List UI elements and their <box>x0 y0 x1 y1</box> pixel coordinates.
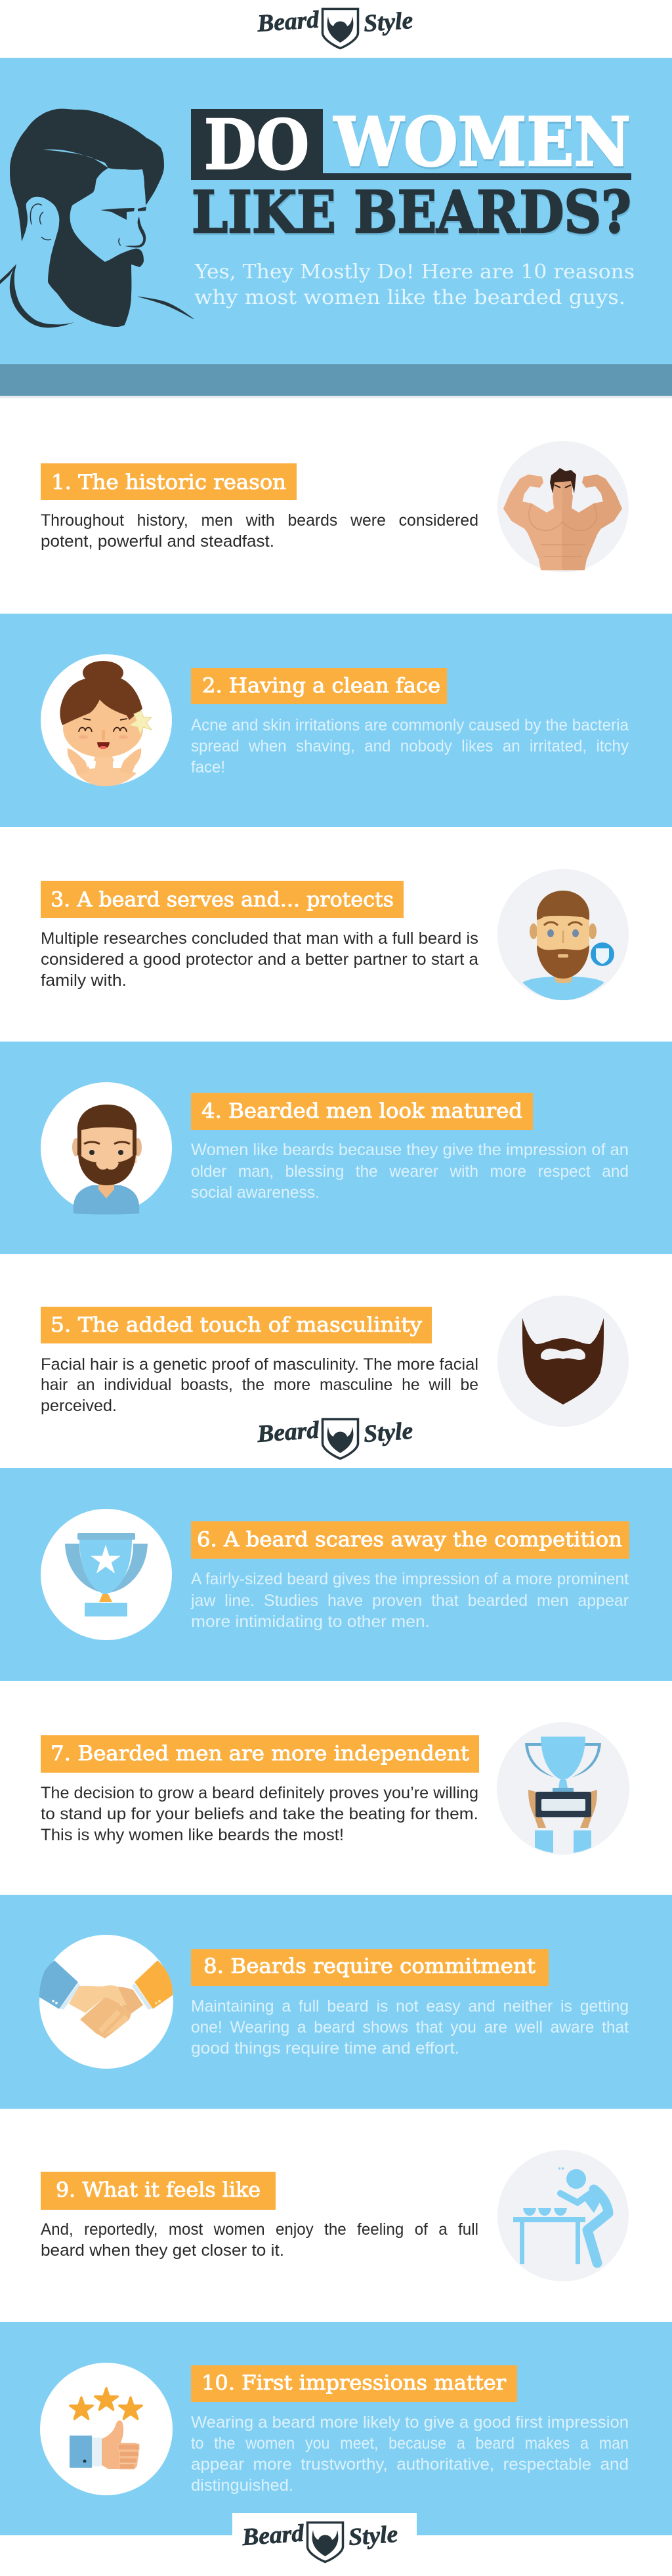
logo: bottom Beard Style <box>232 2513 417 2576</box>
heading 8 <box>191 1949 549 1986</box>
panel: reason 5 <box>0 1254 672 1468</box>
icon: thumbs up with stars <box>40 2363 173 2495</box>
text block 2: Acne and skin irritations are commonly caused by the bacteria <box>191 716 629 734</box>
panel: reason 9 <box>0 2109 672 2322</box>
icon: matured bearded man <box>41 1082 172 1214</box>
text block 3: considered a good protector and a better partner to start a <box>41 950 478 969</box>
logo: top Beard Style: Style <box>363 7 413 37</box>
icon: star trophy <box>41 1509 172 1640</box>
text block 7: to stand up for your beliefs and take the beating for them. <box>41 1805 478 1823</box>
heading 9 <box>41 2172 276 2210</box>
text block 5: hair an individual boasts, the more masculine he will be <box>41 1376 478 1394</box>
text block 6: jaw line. Studies have proven that bearded men appear <box>190 1592 629 1610</box>
icon: bearded man with shield <box>497 869 629 1000</box>
text block 5: Facial hair is a genetic proof of masculinity. The more facial <box>41 1355 478 1374</box>
logo: bottom Beard Style: Style <box>348 2521 398 2551</box>
icon: beard <box>497 1296 629 1427</box>
heading 10: 10. First impressions matter <box>201 2371 506 2395</box>
title: Do Women Like Beards?: WOMEN <box>333 103 631 182</box>
text block 1: Throughout history, men with beards were considered <box>41 511 478 530</box>
text block 3 <box>41 929 478 990</box>
text block 6 <box>190 1570 629 1631</box>
text block 7: This is why women like beards the most! <box>41 1826 344 1844</box>
text block 1 <box>41 511 478 551</box>
heading 3 <box>41 881 404 918</box>
text block 6: A fairly-sized beard gives the impression of a more prominent <box>191 1570 629 1588</box>
logo: top Beard Style <box>256 6 413 49</box>
heading 5 <box>41 1307 432 1343</box>
text block 10: Wearing a beard more likely to give a good first impression <box>191 2413 629 2432</box>
title: Do Women Like Beards?: DO <box>204 104 309 185</box>
text block 10: distinguished. <box>191 2476 293 2495</box>
text block 4: Women like beards because they give the impression of an <box>191 1141 629 1159</box>
text block 4 <box>191 1141 629 1202</box>
panel: reason 2 <box>0 614 672 827</box>
text block 2 <box>191 716 629 776</box>
illustration: bearded man profile <box>0 109 194 327</box>
text block 8: one! Wearing a beard shows that you are well aware that <box>191 2018 629 2037</box>
text block 10: to the women you meet, because a beard makes a man <box>191 2434 629 2453</box>
panel: reason 1 <box>0 396 672 614</box>
text block 8: Maintaining a full beard is not easy and neither is getting <box>191 1997 629 2016</box>
heading 5: 5. The added touch of masculinity <box>51 1313 423 1337</box>
text block 7 <box>41 1784 478 1844</box>
icon: woman washing face <box>41 654 172 786</box>
logo: bottom Beard Style: Beard <box>241 2520 305 2551</box>
text block 5: perceived. <box>41 1397 117 1415</box>
subtitle: why most women like the bearded guys. <box>194 286 625 309</box>
text block 10 <box>191 2413 629 2495</box>
title: Do Women Like Beards?: LIKE BEARDS? <box>192 178 631 246</box>
heading 1: 1. The historic reason <box>51 471 286 494</box>
heading 4 <box>191 1093 533 1130</box>
text block 8: good things require time and effort. <box>191 2039 459 2058</box>
text block 5 <box>41 1355 478 1415</box>
panel: reason 4 <box>0 1042 672 1254</box>
heading 4: 4. Bearded men look matured <box>201 1099 522 1123</box>
heading 3: 3. A beard serves and... protects <box>51 888 394 912</box>
heading 1 <box>41 463 297 500</box>
heading 7: 7. Bearded men are more independent <box>51 1742 470 1765</box>
icon: muscle man <box>497 441 629 572</box>
text block 3: family with. <box>41 971 127 990</box>
heading 10 <box>191 2365 517 2402</box>
text block 9: And, reportedly, most women enjoy the feeling of a full <box>41 2220 478 2239</box>
heading 2: 2. Having a clean face <box>202 674 440 698</box>
icon: handshake <box>39 1935 173 2069</box>
panel: reason 6 <box>0 1468 672 1681</box>
text block 4: social awareness. <box>191 1183 320 1202</box>
logo: middle Beard Style: Beard <box>256 1416 320 1448</box>
heading 6 <box>191 1521 629 1559</box>
subtitle <box>194 261 635 309</box>
text block 8 <box>191 1997 629 2058</box>
icon: person tasting at table <box>497 2150 629 2281</box>
heading 7 <box>41 1735 479 1773</box>
panel: reason 7 <box>0 1681 672 1895</box>
logo: middle Beard Style <box>256 1416 413 1458</box>
subtitle: Yes, They Mostly Do! Here are 10 reasons <box>194 261 635 284</box>
title: Do Women Like Beards? <box>191 103 631 246</box>
text block 3: Multiple researches concluded that man with a full beard is <box>41 929 478 948</box>
panel: reason 10 <box>0 2322 672 2535</box>
dark band under hero <box>0 364 672 396</box>
text block 2: face! <box>191 758 225 776</box>
text block 7: The decision to grow a beard definitely proves you’re willing <box>41 1784 478 1802</box>
text block 10: appear more trustworthy, authoritative, respectable and <box>191 2455 629 2474</box>
heading 9: 9. What it feels like <box>56 2178 261 2202</box>
logo: middle Beard Style: Style <box>363 1418 413 1448</box>
icon: hands holding trophy <box>497 1722 629 1855</box>
panel: reason 8 <box>0 1895 672 2109</box>
panel: reason 3 <box>0 827 672 1042</box>
text block 6: more intimidating to other men. <box>191 1613 430 1631</box>
heading 8: 8. Beards require commitment <box>203 1954 536 1978</box>
text block 2: spread when shaving, and nobody likes an irritated, itchy <box>191 737 629 755</box>
logo: top Beard Style: Beard <box>256 6 320 37</box>
heading 2 <box>191 668 447 704</box>
text block 9 <box>41 2220 478 2260</box>
heading 6: 6. A beard scares away the competition <box>197 1528 622 1552</box>
text block 4: older man, blessing the wearer with more respect and <box>191 1162 629 1181</box>
text block 9: beard when they get closer to it. <box>41 2241 284 2260</box>
panel: hero header <box>0 58 672 396</box>
text block 1: potent, powerful and steadfast. <box>41 532 274 551</box>
